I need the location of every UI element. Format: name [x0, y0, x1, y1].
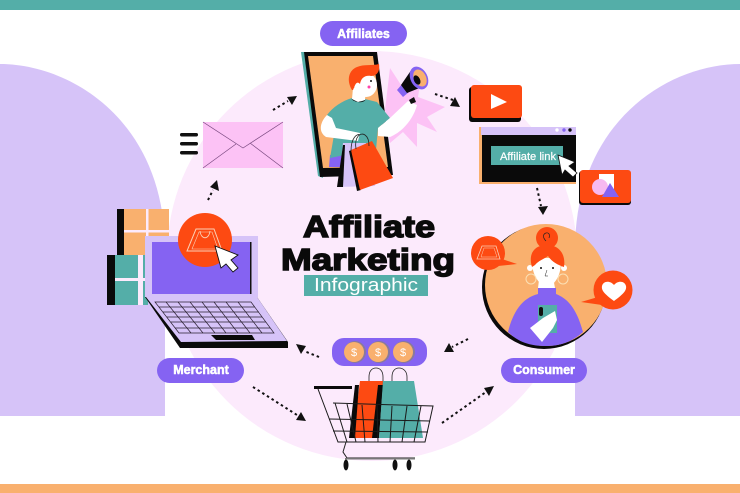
arrow: merchant to cart — [253, 387, 306, 421]
label: Merchant — [157, 358, 244, 383]
orange bag — [353, 381, 383, 438]
icon: affiliate figure in phone — [301, 52, 445, 191]
subtitle: Infographic: Infographic — [314, 275, 418, 295]
icon: envelope — [203, 122, 283, 168]
arrow: browser to consumer — [537, 188, 548, 215]
right lavender arch — [575, 64, 740, 416]
bottom orange band — [0, 484, 740, 493]
orange bag — [349, 150, 361, 191]
icon: coin pill: $ — [400, 347, 406, 359]
black bag gusset — [349, 385, 359, 438]
browser window: affiliate link: Affiliate link — [500, 151, 557, 163]
arrow: coins to laptop — [296, 344, 319, 357]
megaphone — [397, 83, 409, 97]
label: Consumer — [501, 358, 587, 383]
arrow: affiliates to video — [435, 94, 460, 107]
phone body — [301, 52, 323, 178]
icon: coin pill: $ — [351, 347, 357, 359]
teal box — [107, 255, 115, 305]
title: Marketing — [281, 242, 455, 277]
icon: video play card — [469, 85, 522, 122]
bubble: shopping bag — [471, 236, 517, 270]
arrow: cart to consumer — [442, 386, 494, 423]
keyboard — [155, 302, 274, 333]
cart wire — [318, 389, 433, 442]
title: Affiliate — [303, 209, 435, 244]
starburst behind megaphone — [385, 68, 445, 147]
subtitle: Infographic — [304, 275, 428, 296]
teal bag — [379, 381, 423, 438]
title — [281, 209, 455, 277]
arrow: consumer to coins — [444, 339, 468, 352]
label: Affiliates — [320, 21, 407, 46]
shirt — [327, 98, 390, 158]
jeans — [329, 155, 345, 167]
consumer portrait — [482, 224, 607, 349]
bubble: heart — [581, 270, 632, 310]
label: Merchant: Merchant — [173, 363, 230, 377]
neck — [352, 88, 366, 102]
sweater — [508, 288, 583, 346]
icon: shapes card — [579, 170, 631, 205]
handle — [314, 386, 352, 389]
hair — [536, 227, 558, 249]
lavender bag — [338, 143, 375, 187]
earrings — [526, 274, 536, 284]
central pale pink circle — [167, 51, 577, 461]
laptop base — [145, 297, 288, 348]
arrow: envelope to affiliates — [273, 96, 297, 110]
hand — [409, 97, 416, 104]
top teal band — [0, 0, 740, 10]
wheels — [344, 460, 348, 470]
arrow: laptop to envelope — [208, 180, 219, 200]
bag badge — [178, 213, 232, 267]
icon: coin pill — [332, 338, 427, 366]
icon: coin pill: $ — [375, 347, 381, 359]
bag handles — [369, 368, 383, 388]
icon: merchant laptop with boxes — [107, 209, 288, 348]
laptop screen — [145, 236, 258, 297]
arms — [321, 115, 360, 141]
cursor — [558, 155, 577, 177]
icon: menu lines — [180, 133, 198, 154]
left lavender arch — [0, 64, 165, 416]
label: Affiliates: Affiliates — [337, 27, 390, 41]
neck and face — [538, 272, 555, 288]
browser window: affiliate link — [479, 127, 577, 184]
icon: shopping cart with bags — [314, 368, 433, 470]
orange box — [117, 209, 124, 256]
head — [355, 73, 377, 97]
hair — [349, 64, 379, 90]
cursor — [215, 246, 238, 272]
label: Consumer: Consumer — [513, 363, 575, 377]
phone and hand — [538, 305, 557, 333]
face details — [540, 267, 542, 269]
